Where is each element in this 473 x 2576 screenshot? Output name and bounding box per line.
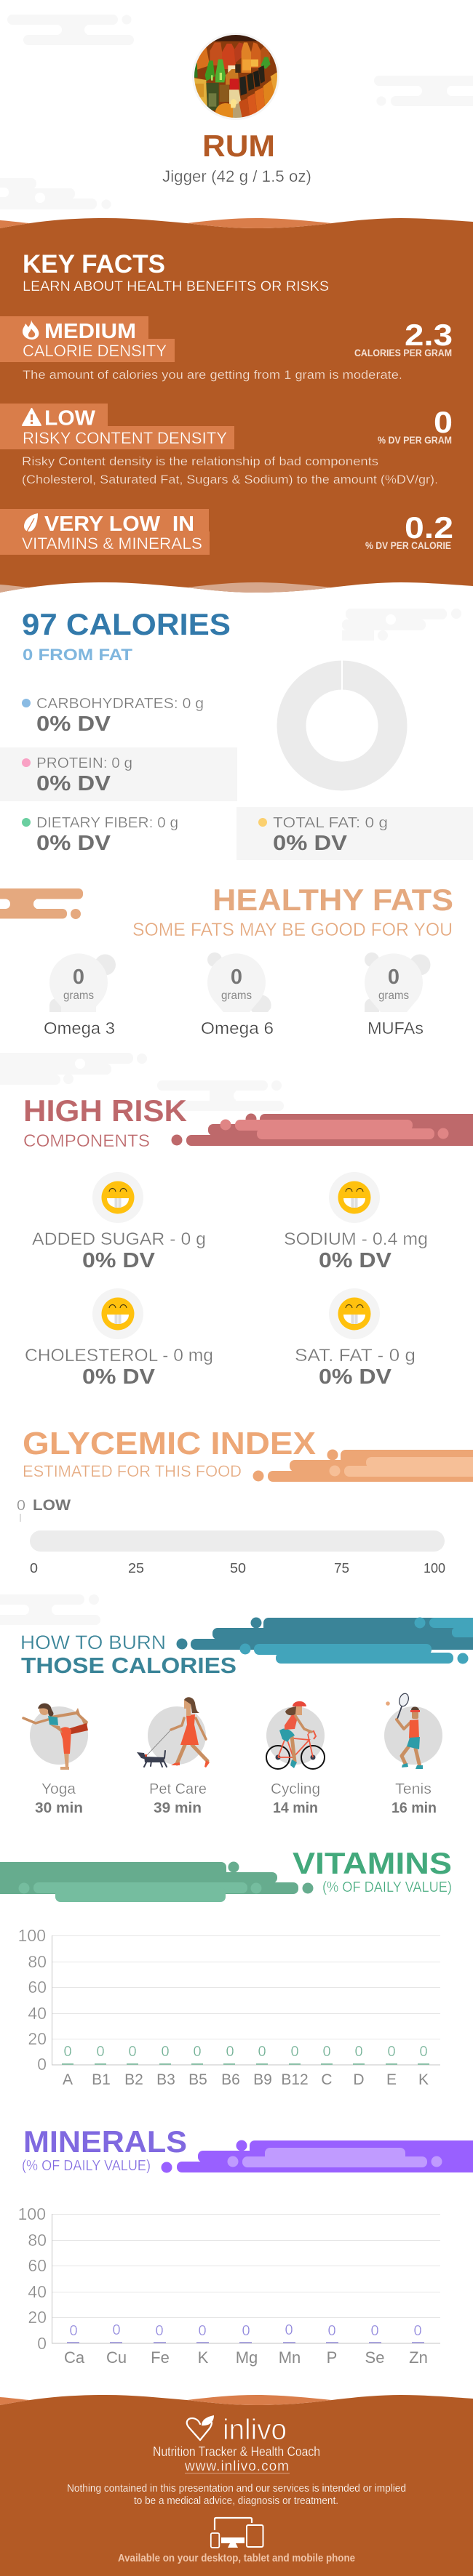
item: added sugar xyxy=(32,1172,206,1272)
value: 2.3: 2.3 xyxy=(405,318,453,352)
bar chart: vitamins: B1 xyxy=(92,2071,111,2088)
bar chart: vitamins: 0 xyxy=(387,2044,396,2060)
bar chart: minerals: 100 xyxy=(18,2204,46,2223)
heading: 97 calories: 97 CALORIES xyxy=(22,607,231,641)
badge: omega 3: Omega 3 xyxy=(44,1019,115,1038)
legend: dietary fiber: 0% DV xyxy=(36,832,111,855)
legend: protein: PROTEIN: 0 g xyxy=(36,755,132,771)
bar chart: vitamins: 0 xyxy=(322,2044,331,2060)
legend: protein xyxy=(0,747,237,801)
bar chart: vitamins: B3 xyxy=(156,2071,175,2088)
unit: dv per gram: % DV PER GRAM xyxy=(378,435,452,446)
heading: those calories: THOSE CALORIES xyxy=(21,1653,236,1678)
bar chart: minerals: Mn xyxy=(279,2348,301,2367)
risky content block xyxy=(0,404,453,486)
label: vitamins and minerals: VITAMINS & MINERALS xyxy=(22,534,202,553)
icon: leaf xyxy=(24,513,38,531)
subheading: LEARN ABOUT HEALTH BENEFITS OR RISKS xyxy=(23,278,329,294)
header graphic xyxy=(253,1450,473,1482)
bar chart: minerals: Fe xyxy=(151,2348,170,2367)
header graphic xyxy=(162,2140,473,2172)
panel: footer xyxy=(0,2395,473,2576)
panel: how to burn those calories xyxy=(20,1617,473,1816)
gauge scale xyxy=(30,1561,445,1576)
item: cholesterol: CHOLESTEROL - 0 mg xyxy=(25,1346,213,1365)
bar chart: vitamins: A xyxy=(63,2071,73,2088)
bar chart: minerals: 0 xyxy=(37,2334,47,2353)
label: yoga: Yoga xyxy=(41,1781,76,1797)
icon: cyclist xyxy=(266,1701,325,1769)
bar chart: vitamins: B2 xyxy=(124,2071,143,2088)
subheading: from fat: 0 FROM FAT xyxy=(23,646,133,664)
bar chart: minerals: 0 xyxy=(112,2322,121,2338)
bar chart: vitamins: 60 xyxy=(28,1978,47,1997)
header graphic xyxy=(0,888,83,919)
bar chart: minerals: P xyxy=(327,2348,337,2367)
gauge marker: 0 xyxy=(17,1498,25,1514)
header graphic xyxy=(176,1617,473,1664)
bar chart: vitamins: C xyxy=(321,2071,333,2088)
bar chart: vitamins: 40 xyxy=(28,2004,47,2023)
bar chart: vitamins: 0 xyxy=(63,2044,72,2060)
value: 0.2: 0.2 xyxy=(405,510,453,545)
bar chart: minerals: 0 xyxy=(327,2323,336,2339)
duration: tennis: 16 min xyxy=(391,1800,437,1816)
gauge marker xyxy=(17,1497,71,1522)
panel: minerals xyxy=(18,2124,473,2367)
duration: pet care: 39 min xyxy=(154,1800,202,1816)
background cloud: burn section xyxy=(0,1594,103,1625)
badge: omega 3: grams xyxy=(63,990,94,1002)
unit: dv per calorie: % DV PER CALORIE xyxy=(365,540,451,551)
legend: protein: 0% DV xyxy=(36,772,111,795)
panel: glycemic index xyxy=(17,1426,473,1576)
bar chart: minerals: Mg xyxy=(236,2348,258,2367)
background cloud: top right xyxy=(374,76,473,106)
rating: low: LOW xyxy=(44,407,96,430)
item: sodium: SODIUM - 0.4 mg xyxy=(284,1229,428,1249)
duration: yoga: 30 min xyxy=(35,1800,83,1816)
activity: tennis xyxy=(384,1693,442,1816)
icon: flame xyxy=(23,320,39,340)
description xyxy=(22,454,438,486)
bar chart: vitamins: B5 xyxy=(188,2071,207,2088)
bar chart: minerals: 60 xyxy=(28,2256,47,2275)
bar chart: vitamins: 0 xyxy=(161,2044,170,2060)
bar chart: minerals: 0 xyxy=(69,2323,78,2339)
bar chart: minerals: 80 xyxy=(28,2231,47,2250)
badge: omega 6 xyxy=(201,952,274,1038)
item: added sugar: ADDED SUGAR - 0 g xyxy=(32,1229,206,1249)
heading: glycemic index: GLYCEMIC INDEX xyxy=(23,1426,316,1461)
bar chart: minerals: 0 xyxy=(413,2323,422,2339)
panel: vitamins xyxy=(0,1846,452,2088)
legend: total fat: 0% DV xyxy=(273,832,348,855)
legend: dietary fiber xyxy=(22,815,178,855)
panel: calories xyxy=(0,607,473,860)
legend: carbohydrates: CARBOHYDRATES: 0 g xyxy=(36,696,204,712)
bar chart: minerals: K xyxy=(198,2348,209,2367)
bar chart: minerals: 20 xyxy=(28,2308,47,2327)
item: added sugar: 0% DV xyxy=(82,1249,156,1272)
footer wave background xyxy=(0,2395,473,2576)
badge: omega 6: grams xyxy=(221,990,252,1002)
wave background xyxy=(0,218,473,604)
badge: omega 3 xyxy=(44,953,116,1038)
panel: high risk components xyxy=(23,1094,473,1389)
label: tennis: Tenis xyxy=(395,1781,432,1797)
bar chart: minerals: 0 xyxy=(370,2323,379,2339)
bar chart: minerals xyxy=(18,2204,440,2367)
bar chart: vitamins: D xyxy=(353,2071,365,2088)
icon: warning triangle xyxy=(23,409,41,425)
rating: medium: MEDIUM xyxy=(44,320,136,343)
heading: healthy fats: HEALTHY FATS xyxy=(212,883,453,917)
badge: omega 3: 0 xyxy=(73,966,84,989)
bar chart: minerals: Se xyxy=(365,2348,384,2367)
bar chart: vitamins: 0 xyxy=(354,2044,363,2060)
background cloud: top left xyxy=(7,15,135,45)
label: calorie density: CALORIE DENSITY xyxy=(23,342,167,360)
disclaimer: Nothing contained in this presentation and our services is intended or implied xyxy=(67,2482,406,2495)
bar chart: minerals: Cu xyxy=(106,2348,127,2367)
gauge track xyxy=(30,1530,445,1552)
item: saturated fat: 0% DV xyxy=(319,1365,392,1389)
background cloud: mid left xyxy=(0,178,111,209)
label: cycling: Cycling xyxy=(271,1781,320,1797)
bar chart: vitamins: B12 xyxy=(281,2071,309,2088)
badge: omega 6: Omega 6 xyxy=(201,1019,274,1038)
icon: walking figure with dog xyxy=(137,1697,210,1768)
bar chart: minerals: 0 xyxy=(242,2323,250,2339)
subheading: SOME FATS MAY BE GOOD FOR YOU xyxy=(132,920,453,940)
logo: inlivo: inlivo xyxy=(223,2414,287,2446)
activity: yoga xyxy=(23,1704,88,1816)
duration: cycling: 14 min xyxy=(273,1800,318,1816)
heading: how to burn: HOW TO BURN xyxy=(20,1632,166,1653)
bar chart: vitamins: E xyxy=(386,2071,397,2088)
item: cholesterol xyxy=(25,1288,213,1389)
header graphic xyxy=(172,1114,473,1146)
tagline: Nutrition Tracker & Health Coach xyxy=(153,2444,320,2459)
bar chart: vitamins: 80 xyxy=(28,1952,47,1971)
label: risky content density: RISKY CONTENT DENSITY xyxy=(23,429,227,447)
gauge scale: 75 xyxy=(334,1561,349,1576)
bar chart: minerals: Zn xyxy=(409,2348,428,2367)
bar chart: vitamins: B9 xyxy=(253,2071,272,2088)
badge: omega 6: 0 xyxy=(231,966,242,989)
subheading: (% OF DAILY VALUE) xyxy=(22,2158,151,2174)
item: sodium xyxy=(284,1172,428,1272)
bar chart: vitamins: 20 xyxy=(28,2029,47,2048)
disclaimer: to be a medical advice, diagnosis or treatment. xyxy=(134,2495,338,2507)
header graphic xyxy=(0,1861,313,1902)
bar chart: minerals: 0 xyxy=(285,2322,293,2338)
food photo: bottles of rum xyxy=(192,33,279,120)
activity: cycling xyxy=(266,1701,325,1816)
legend: dietary fiber: DIETARY FIBER: 0 g xyxy=(36,815,178,831)
background cloud: calories xyxy=(342,609,461,641)
rating: very low in: VERY LOW IN xyxy=(44,513,194,536)
heading: vitamins: VITAMINS xyxy=(293,1846,452,1880)
gauge scale: 25 xyxy=(128,1561,144,1576)
subheading: components: COMPONENTS xyxy=(23,1131,150,1151)
legend: total fat xyxy=(236,807,473,860)
bar chart: vitamins xyxy=(18,1926,440,2088)
label: pet care: Pet Care xyxy=(149,1781,207,1797)
bar chart: vitamins: 0 xyxy=(128,2044,137,2060)
legend: carbohydrates xyxy=(22,696,204,736)
item: saturated fat xyxy=(295,1288,416,1389)
bar chart: vitamins: 0 xyxy=(226,2044,234,2060)
gauge marker: LOW xyxy=(33,1497,71,1514)
bar chart: vitamins: 0 xyxy=(193,2044,202,2060)
bar chart: minerals: 40 xyxy=(28,2282,47,2301)
bar chart: vitamins: 0 xyxy=(96,2044,105,2060)
bar chart: vitamins: B6 xyxy=(221,2071,240,2088)
badge: mufas xyxy=(365,952,431,1038)
gauge scale: 50 xyxy=(230,1561,246,1576)
logo: inlivo xyxy=(187,2414,287,2446)
unit: calories per gram: CALORIES PER GRAM xyxy=(354,348,452,358)
donut chart xyxy=(291,659,393,777)
legend: carbohydrates: 0% DV xyxy=(36,713,111,736)
bar chart: vitamins: 0 xyxy=(37,2055,47,2074)
bar chart: vitamins: 0 xyxy=(290,2044,299,2060)
bar chart: minerals: 0 xyxy=(198,2323,207,2339)
badge: mufas: 0 xyxy=(388,966,400,989)
item: sodium: 0% DV xyxy=(319,1249,392,1272)
activity: pet care xyxy=(137,1697,210,1816)
gauge scale: 0 xyxy=(30,1561,38,1576)
title: RUM xyxy=(202,129,275,163)
bar chart: vitamins: 0 xyxy=(419,2044,428,2060)
heading: key facts: KEY FACTS xyxy=(23,250,165,278)
panel: healthy fats xyxy=(0,883,453,1038)
item: cholesterol: 0% DV xyxy=(82,1365,156,1389)
background cloud: between fats and risk xyxy=(0,1053,285,1111)
vitamins and minerals block xyxy=(0,509,453,555)
description: The amount of calories you are getting from 1 gram is moderate. xyxy=(23,368,402,382)
panel: key facts xyxy=(0,218,473,604)
bar chart: vitamins: 100 xyxy=(18,1926,46,1945)
bar chart: vitamins: 0 xyxy=(258,2044,266,2060)
bar chart: minerals: Ca xyxy=(64,2348,85,2367)
calorie density block xyxy=(0,316,453,382)
icon: yoga figure xyxy=(23,1704,88,1770)
icon: devices xyxy=(211,2518,263,2548)
availability note: Available on your desktop, tablet and mobile phone xyxy=(118,2552,355,2564)
subheading: (% OF DAILY VALUE) xyxy=(322,1879,452,1895)
item: saturated fat: SAT. FAT - 0 g xyxy=(295,1346,416,1365)
badge: mufas: MUFAs xyxy=(367,1019,424,1038)
description: (Cholesterol, Saturated Fat, Sugars & Sodium) to the amount (%DV/gr). xyxy=(22,473,438,486)
bar chart: vitamins: K xyxy=(418,2071,429,2088)
heading: minerals: MINERALS xyxy=(23,2124,187,2159)
website link: www.inlivo.com xyxy=(184,2459,289,2474)
disclaimer xyxy=(67,2482,406,2507)
badge: mufas: grams xyxy=(378,990,409,1002)
icon: tennis player xyxy=(384,1693,442,1769)
subheading: ESTIMATED FOR THIS FOOD xyxy=(23,1462,242,1480)
description: Risky Content density is the relationship of bad components xyxy=(22,454,378,468)
value: 0: 0 xyxy=(434,405,453,439)
gauge scale: 100 xyxy=(424,1561,445,1576)
heading: high risk: HIGH RISK xyxy=(23,1094,187,1128)
legend: total fat: TOTAL FAT: 0 g xyxy=(273,815,388,831)
serving size: Jigger (42 g / 1.5 oz) xyxy=(162,167,311,185)
bar chart: minerals: 0 xyxy=(155,2323,164,2339)
